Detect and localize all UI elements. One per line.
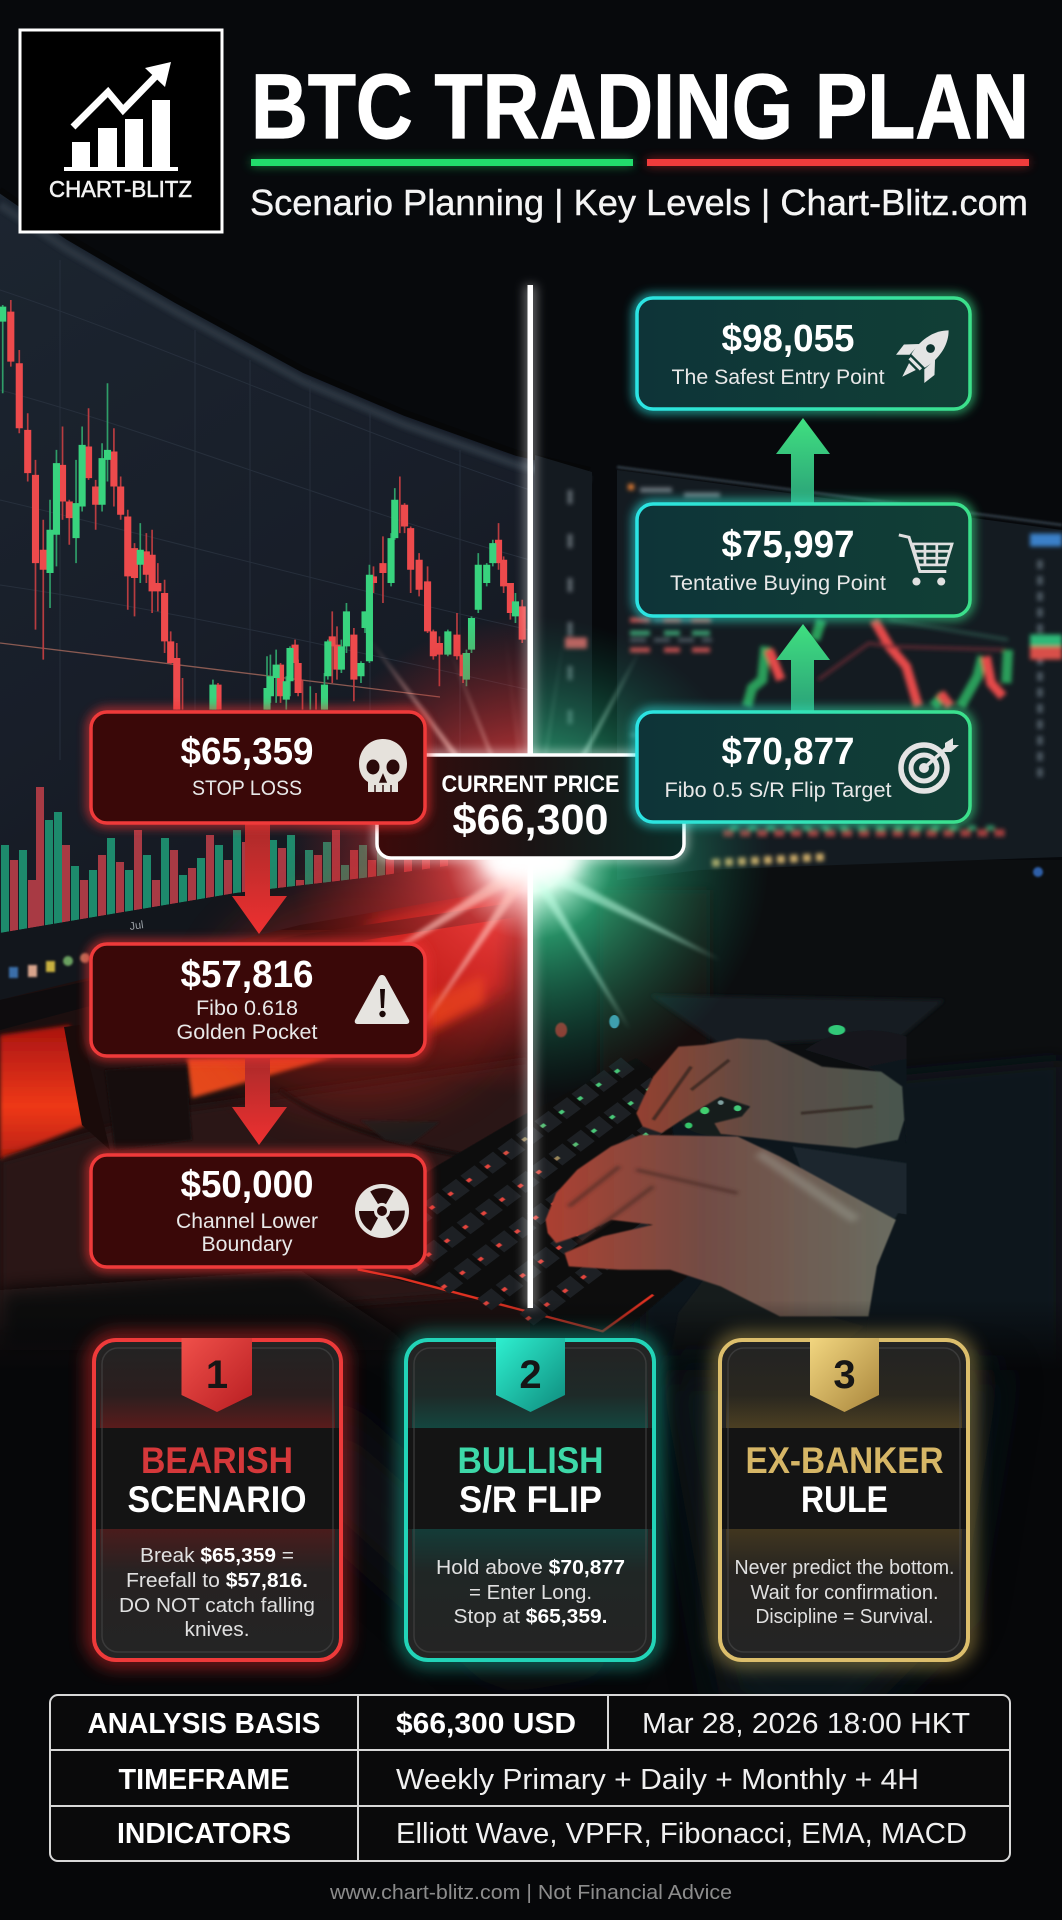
heading: SCENARIO xyxy=(128,1479,306,1520)
table row: timeframe xyxy=(118,1764,919,1796)
level card: $75,997: $75,997 xyxy=(722,524,854,566)
body text: Wait for confirmation. xyxy=(750,1582,938,1604)
table row: analysis basis: Mar 28, 2026 18:00 HKT xyxy=(642,1708,970,1740)
keyboard xyxy=(294,1015,1062,1360)
level card: $70,877: $70,877 xyxy=(722,731,854,773)
arrow: up to $98,055 xyxy=(776,418,830,506)
left monitor screen with candlesticks xyxy=(0,190,590,1030)
level card: $57,816: Golden Pocket xyxy=(176,1021,318,1044)
icon: shopping cart xyxy=(899,535,952,586)
icon: warning triangle xyxy=(355,975,409,1024)
arrow: up to $75,997 xyxy=(776,624,830,714)
body text xyxy=(119,1545,315,1641)
icon: skull xyxy=(359,739,407,792)
badge 2 xyxy=(496,1338,565,1412)
body text: = Enter Long. xyxy=(469,1582,592,1604)
trackball / green lit keys xyxy=(679,1094,750,1136)
red desk glow xyxy=(210,890,510,1110)
subtitle: Scenario Planning | Key Levels | Chart-Blitz.com xyxy=(250,182,1028,223)
table row: timeframe: Weekly Primary + Daily + Monthly + 4H xyxy=(396,1764,919,1796)
title underline: green and red xyxy=(251,159,1029,166)
lower hand xyxy=(546,1135,896,1316)
level card: $70,877 xyxy=(637,712,970,822)
level card: $70,877: Fibo 0.5 S/R Flip Target xyxy=(664,779,892,802)
body text: Hold above $70,877 xyxy=(436,1557,625,1579)
table row: analysis basis xyxy=(88,1708,970,1740)
level card: $98,055: $98,055 xyxy=(722,318,854,360)
badge 3: 3 xyxy=(833,1353,856,1397)
desk mat xyxy=(792,1146,987,1228)
body text: Never predict the bottom. xyxy=(734,1557,954,1579)
current price card: $66,300 xyxy=(452,796,608,844)
level card: $98,055 xyxy=(637,298,970,409)
panel: bearish scenario xyxy=(94,1338,341,1660)
level card: $65,359 stop loss: STOP LOSS xyxy=(192,777,302,800)
icon: target xyxy=(901,738,959,791)
body text: Break $65,359 = xyxy=(140,1545,294,1567)
header logo: CHART-BLITZ xyxy=(49,176,192,202)
level card: $75,997: Tentative Buying Point xyxy=(670,572,886,595)
badge 1 xyxy=(182,1338,252,1412)
heading: BULLISH xyxy=(458,1440,604,1481)
heading: S/R FLIP xyxy=(459,1479,602,1520)
upper hand xyxy=(636,1038,904,1148)
level card: $50,000: Boundary xyxy=(202,1233,293,1256)
level card: $50,000: $50,000 xyxy=(180,1164,314,1206)
body text xyxy=(734,1557,954,1628)
badge 2: 2 xyxy=(519,1353,542,1397)
level card: $57,816: $57,816 xyxy=(180,954,314,996)
right monitor screen xyxy=(535,455,1062,880)
"Jul" axis and task-bar strip xyxy=(0,845,590,1000)
body text: Stop at $65,359. xyxy=(454,1606,608,1628)
table row: indicators: INDICATORS xyxy=(117,1818,291,1850)
level card: $50,000: Channel Lower xyxy=(176,1210,318,1233)
level card: $75,997 xyxy=(637,504,970,616)
left red-lit wall and desk xyxy=(0,890,530,1380)
badge 3 xyxy=(810,1338,879,1412)
level card: $65,359 stop loss: $65,359 xyxy=(180,731,314,773)
body text xyxy=(436,1557,625,1628)
upper sleeve xyxy=(868,1037,1062,1170)
body text: Discipline = Survival. xyxy=(756,1606,934,1628)
level card: $50,000 xyxy=(91,1155,425,1267)
header logo xyxy=(20,30,222,232)
panel: bullish S/R flip xyxy=(406,1338,654,1660)
candles xyxy=(3,300,522,710)
central divider line xyxy=(524,285,537,1308)
body text: Freefall to $57,816. xyxy=(126,1570,308,1592)
starburst at current price xyxy=(290,616,770,1096)
info table xyxy=(50,1695,1010,1861)
mouse with indicator lights xyxy=(555,1015,932,1070)
left monitor screen with candlesticks: Jul xyxy=(129,919,144,933)
logo bar chart icon xyxy=(64,62,178,171)
bottom background fade xyxy=(0,1300,1062,1920)
current price card xyxy=(377,755,684,858)
body text: DO NOT catch falling xyxy=(119,1595,315,1617)
heading xyxy=(458,1440,604,1520)
badge 1: 1 xyxy=(206,1353,228,1397)
level card: $57,816 xyxy=(91,944,425,1056)
panel: ex-banker rule xyxy=(720,1338,968,1660)
heading: RULE xyxy=(801,1479,888,1520)
current price card: CURRENT PRICE xyxy=(442,771,620,798)
arrow: down to $57,816 xyxy=(232,820,287,934)
arrow: down to $50,000 xyxy=(232,1054,287,1145)
footer: www.chart-blitz.com | Not Financial Advice xyxy=(329,1882,732,1904)
table row: analysis basis: ANALYSIS BASIS xyxy=(88,1708,320,1740)
level card: $98,055: The Safest Entry Point xyxy=(672,366,885,389)
heading xyxy=(746,1440,944,1520)
level card: $65,359 stop loss xyxy=(91,712,425,823)
icon: rocket xyxy=(887,315,964,392)
table row: indicators xyxy=(117,1818,967,1850)
icon: radiation symbol xyxy=(355,1181,411,1238)
volume bars xyxy=(5,787,444,940)
level card: $57,816: Fibo 0.618 xyxy=(196,997,298,1020)
body text: knives. xyxy=(184,1619,250,1641)
table row: timeframe: TIMEFRAME xyxy=(118,1764,290,1796)
heading: BEARISH xyxy=(141,1440,293,1481)
table row: analysis basis: $66,300 USD xyxy=(396,1708,576,1740)
heading: EX-BANKER xyxy=(746,1440,944,1481)
table row: indicators: Elliott Wave, VPFR, Fibonacci, EMA, MACD xyxy=(396,1818,967,1850)
heading xyxy=(128,1440,306,1520)
lower sleeve xyxy=(864,1213,1062,1360)
right wall and desk tone xyxy=(530,860,1062,1380)
